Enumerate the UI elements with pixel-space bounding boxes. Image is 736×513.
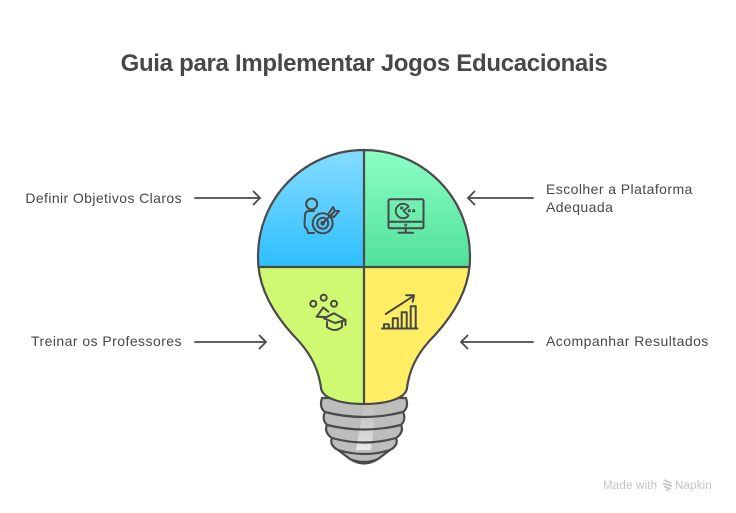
light bulb xyxy=(258,150,470,464)
label: Acompanhar Resultados: Acompanhar Resultados xyxy=(546,333,709,349)
icon: Napkin logo xyxy=(663,480,672,490)
bulb base highlight xyxy=(356,405,376,450)
watermark: Made with Napkin: Made with xyxy=(603,480,657,492)
quadrant: blue xyxy=(258,150,364,267)
bulb outline xyxy=(258,150,470,404)
arrow: to green quadrant xyxy=(468,192,533,204)
label: Treinar os Professores: Treinar os Professores xyxy=(31,333,182,349)
arrow: to lime quadrant xyxy=(195,336,266,348)
arrow: to blue quadrant xyxy=(195,192,260,204)
icon: people with graduation cap xyxy=(310,295,346,330)
arrow: to yellow quadrant xyxy=(461,336,533,348)
watermark: Made with Napkin xyxy=(603,480,712,492)
quadrant: green xyxy=(364,150,470,267)
quadrant: lime xyxy=(258,267,364,404)
icon: monitor with game xyxy=(388,199,424,233)
label: Definir Objetivos Claros: Definir Objetivos Claros xyxy=(25,190,182,206)
icon: person with target xyxy=(304,198,339,233)
quadrant: yellow xyxy=(364,267,470,404)
watermark: Made with Napkin: Napkin xyxy=(675,480,712,492)
icon: bar chart with arrow xyxy=(382,295,418,328)
bulb screw base xyxy=(321,398,407,464)
title: Guia para Implementar Jogos Educacionais xyxy=(121,50,607,77)
bulb base threads xyxy=(325,412,403,462)
label: Escolher a Plataforma Adequada: Adequada xyxy=(546,199,613,215)
label: Escolher a Plataforma Adequada: Escolher a Plataforma xyxy=(546,181,693,197)
